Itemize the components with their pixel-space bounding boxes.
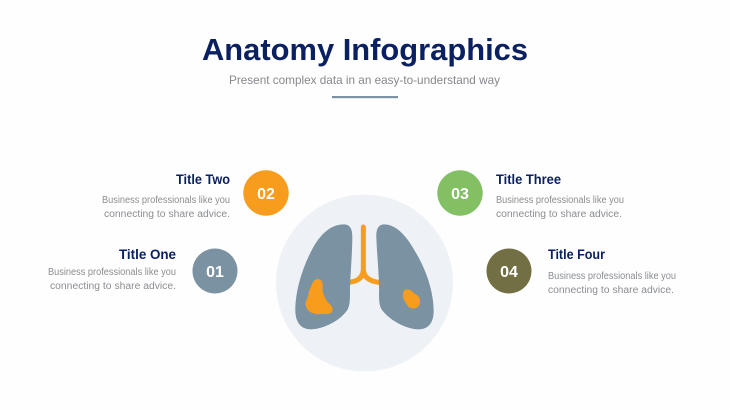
number badge 01 — [192, 248, 238, 294]
description: connecting to share advice. — [50, 281, 176, 292]
item: Title Four — [486, 246, 676, 296]
right lung — [376, 224, 434, 329]
lungs icon — [295, 224, 434, 329]
background circle — [276, 194, 453, 372]
item: Title One — [48, 246, 238, 294]
heading: Title Two — [176, 171, 230, 187]
title underline — [332, 96, 398, 98]
number badge 03: 03 — [451, 186, 469, 203]
central lungs illustration — [276, 194, 453, 372]
number badge 02 — [243, 170, 289, 216]
description: Business professionals like you — [102, 195, 230, 206]
number badge 03 — [437, 170, 483, 216]
left lung spot — [306, 279, 333, 314]
left lung — [295, 224, 352, 329]
description: Business professionals like you — [496, 195, 624, 206]
item: Title Two — [102, 170, 289, 220]
number badge 02: 02 — [257, 186, 275, 203]
number badge 01: 01 — [206, 264, 224, 281]
heading: Title Three — [496, 171, 561, 187]
title: Anatomy Infographics — [202, 33, 528, 67]
description: connecting to share advice. — [496, 209, 622, 220]
description: Business professionals like you — [48, 267, 176, 278]
heading: Title One — [119, 246, 176, 262]
trachea and bronchi — [351, 227, 378, 282]
number badge 04 — [486, 248, 532, 294]
description: Business professionals like you — [548, 271, 676, 282]
item: Title Three — [437, 170, 624, 220]
number badge 04: 04 — [500, 264, 518, 281]
description: connecting to share advice. — [548, 285, 674, 296]
right lung spot — [403, 289, 420, 308]
description: connecting to share advice. — [104, 209, 230, 220]
subtitle: Present complex data in an easy-to-understand way — [229, 73, 500, 87]
heading: Title Four — [548, 246, 605, 262]
